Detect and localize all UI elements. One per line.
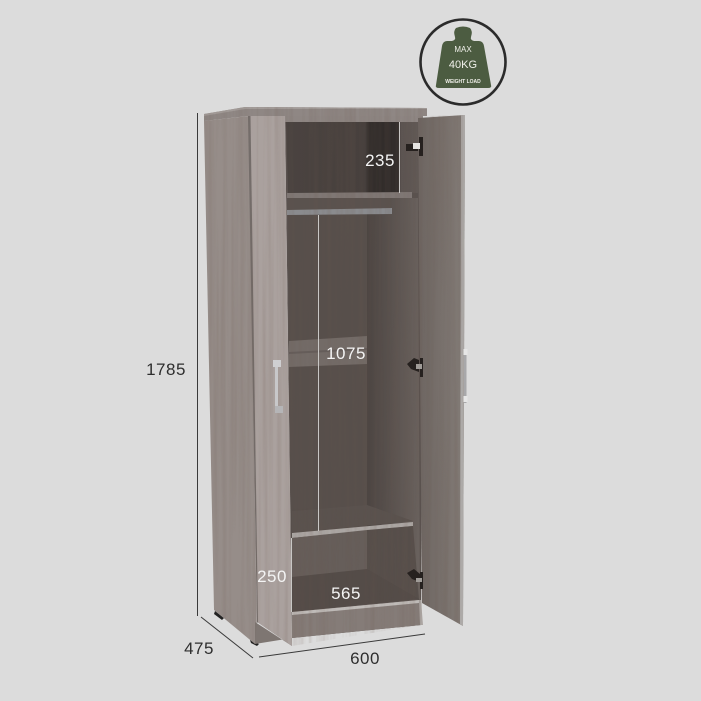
open interior backing	[285, 116, 423, 638]
band below shelf	[288, 198, 392, 210]
hanging rail	[287, 208, 392, 215]
interior dimension lines	[292, 122, 400, 612]
floor	[292, 569, 419, 612]
wood grain	[200, 105, 470, 650]
top inner lip	[285, 116, 423, 122]
upper compartment back	[286, 122, 418, 193]
side panel	[204, 116, 257, 644]
hinge: middle	[407, 358, 423, 377]
upper shelf	[287, 192, 412, 198]
hinge: bottom	[407, 569, 423, 589]
back rail	[289, 336, 367, 367]
outer dimension lines	[198, 113, 425, 658]
right door	[418, 115, 465, 626]
lower shelf front	[292, 522, 413, 538]
plinth corner	[419, 600, 423, 625]
label: 475 depth: 475	[184, 639, 214, 658]
base front	[292, 600, 421, 638]
label: 1785 height: 1785	[146, 360, 186, 379]
hinge: top	[406, 137, 423, 156]
lower compartment back	[288, 198, 367, 578]
left door	[249, 113, 292, 646]
label: 565: 565	[331, 584, 361, 603]
badge text: WEIGHT LOAD: WEIGHT LOAD	[445, 79, 481, 85]
lower compartment	[292, 530, 367, 578]
feet	[214, 611, 224, 620]
label: 1075: 1075	[326, 344, 366, 363]
label: 235: 235	[365, 151, 395, 170]
badge: max weight load	[420, 20, 506, 104]
badge text: 40KG: 40KG	[449, 59, 477, 71]
badge text: MAX: MAX	[454, 45, 472, 54]
left door handle	[273, 360, 283, 413]
lower shelf top	[292, 505, 413, 533]
icon: weight	[436, 26, 491, 88]
wardrobe dimension infographic	[147, 18, 507, 664]
right door handle	[464, 349, 468, 403]
wardrobe	[200, 105, 470, 650]
top panel	[204, 107, 427, 121]
base under door	[255, 622, 292, 646]
label: 250: 250	[257, 567, 287, 586]
inner side panel	[367, 198, 420, 600]
label: 600 width: 600	[350, 649, 380, 668]
